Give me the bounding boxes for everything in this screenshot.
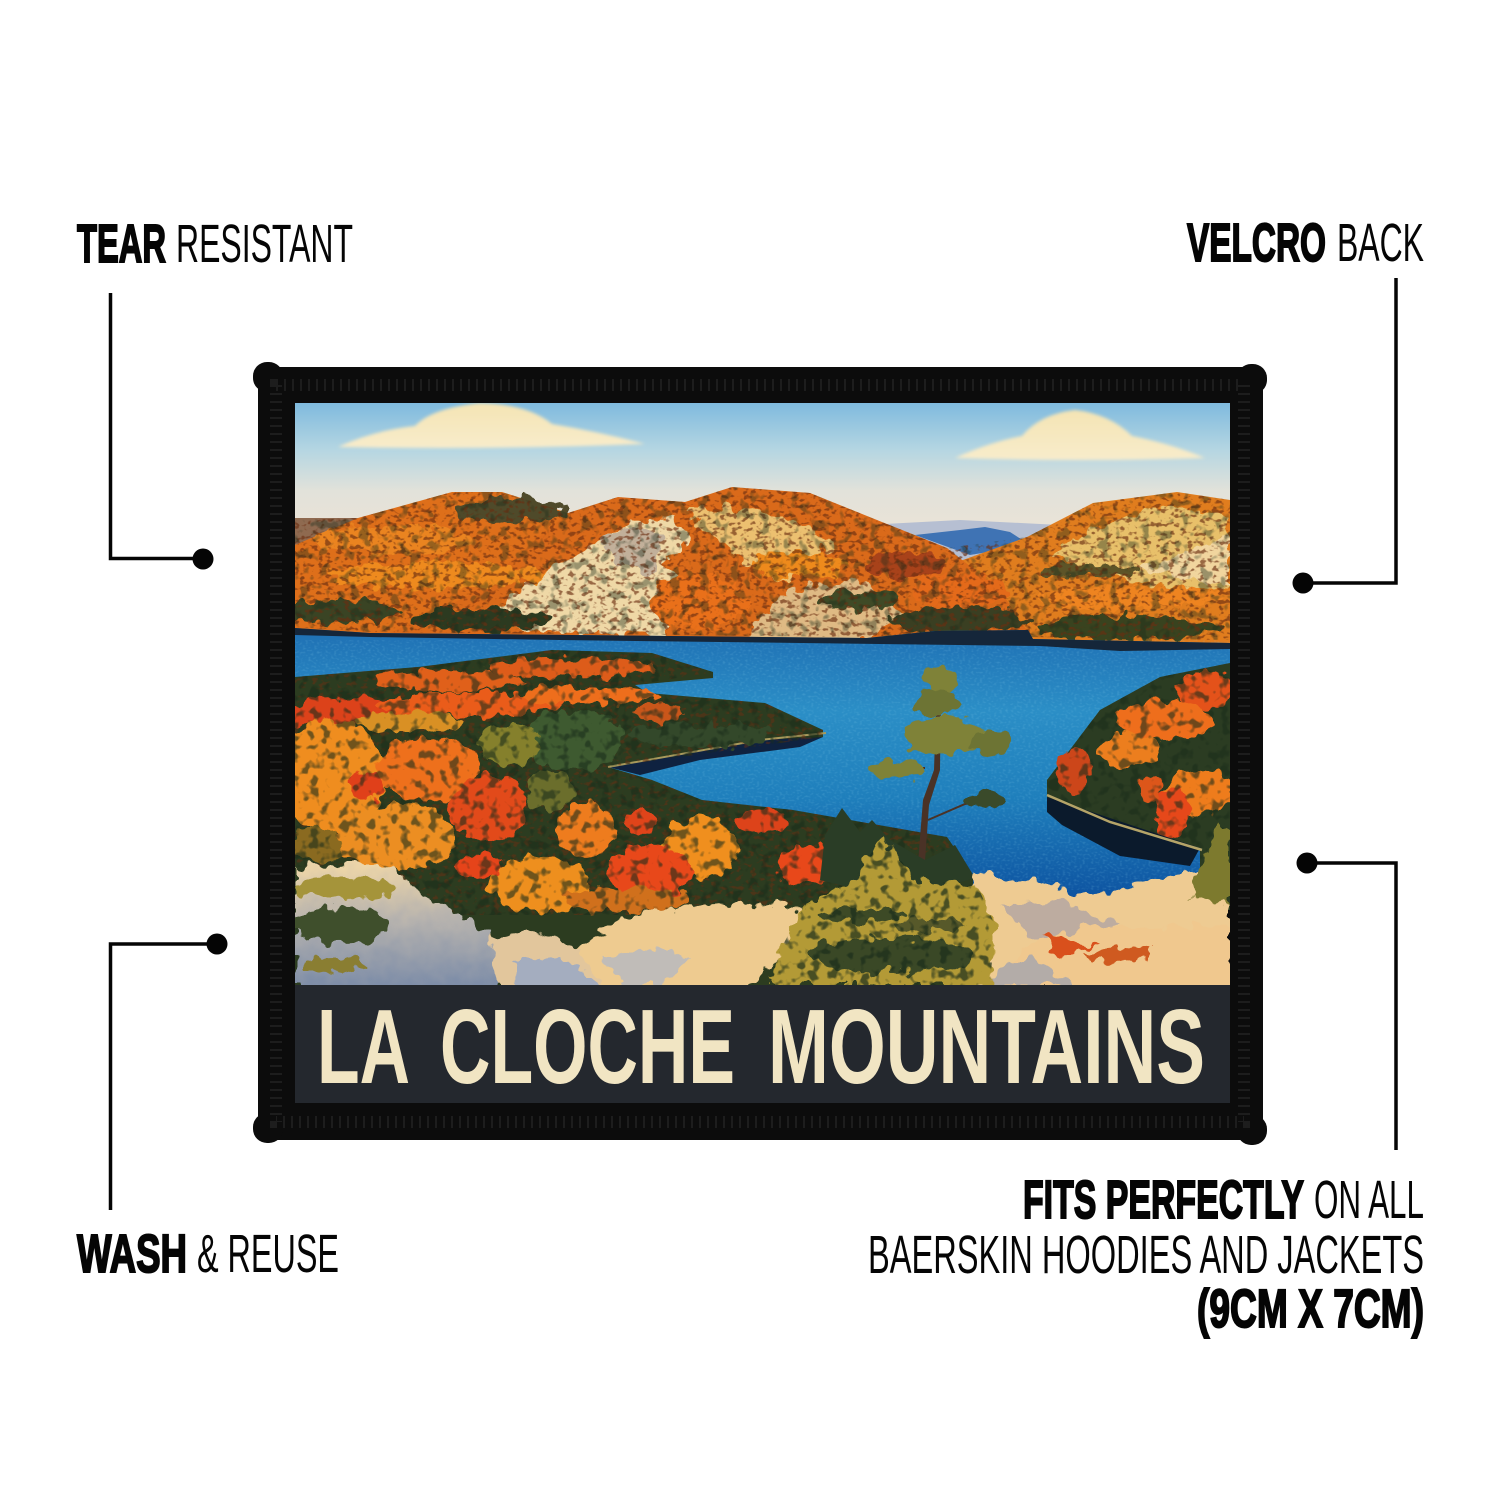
hill rock and colour patches <box>310 497 1228 642</box>
forest texture <box>295 645 1230 915</box>
callout: tear resistant: RESISTANT <box>176 214 353 274</box>
callout: velcro back: BACK <box>1337 213 1424 273</box>
callout: velcro back: VELCRO <box>1187 213 1326 273</box>
callout: fits perfectly: FITS PERFECTLY <box>1023 1170 1304 1230</box>
distant mountains <box>885 520 1060 560</box>
sky <box>295 403 1230 573</box>
patch artwork <box>275 403 1233 990</box>
treeline along far shore <box>280 600 1225 640</box>
foreground pine shrub <box>770 835 1000 985</box>
conifers beside trunk <box>820 808 972 886</box>
right forest autumn patches <box>1059 672 1233 837</box>
left far hill <box>295 492 568 634</box>
callout: fits perfectly: ON ALL <box>1314 1170 1424 1230</box>
callout: wash and reuse: & REUSE <box>197 1224 339 1284</box>
callout: tear resistant <box>77 214 353 570</box>
banner <box>295 985 1230 1103</box>
patch title <box>317 988 1205 1106</box>
right shore reflection <box>1047 797 1200 866</box>
callout: wash and reuse <box>77 934 339 1284</box>
pine tree <box>870 667 1010 875</box>
patch border <box>253 362 1267 1145</box>
callout: wash and reuse: WASH <box>77 1224 187 1284</box>
callout: tear resistant: TEAR <box>77 214 166 274</box>
patch title: MOUNTAINS <box>768 988 1205 1106</box>
patch title: LA <box>317 988 410 1106</box>
right shoreline highlight <box>1047 795 1202 850</box>
far shoreline <box>295 628 1230 651</box>
lake ripple texture <box>295 640 1230 890</box>
rocks <box>295 863 1230 990</box>
hill texture <box>295 485 1230 640</box>
callout: fits perfectly <box>868 852 1424 1339</box>
left shrub on rock <box>290 876 395 973</box>
right forest <box>1047 663 1230 910</box>
right bank foliage <box>1190 825 1230 905</box>
center mountain <box>564 487 1026 638</box>
shoreline of peninsula <box>608 733 826 767</box>
lake <box>295 628 1230 900</box>
forest autumn patches <box>275 658 844 913</box>
left edge far ridge <box>295 518 358 545</box>
callout: velcro back <box>1187 213 1424 594</box>
forest texture base <box>295 645 1230 915</box>
left forest peninsula <box>295 650 973 985</box>
right hill <box>962 492 1230 643</box>
peninsula reflection <box>608 737 823 775</box>
clouds <box>338 403 1205 460</box>
patch title: CLOCHE <box>440 988 735 1106</box>
patch <box>253 362 1267 1145</box>
